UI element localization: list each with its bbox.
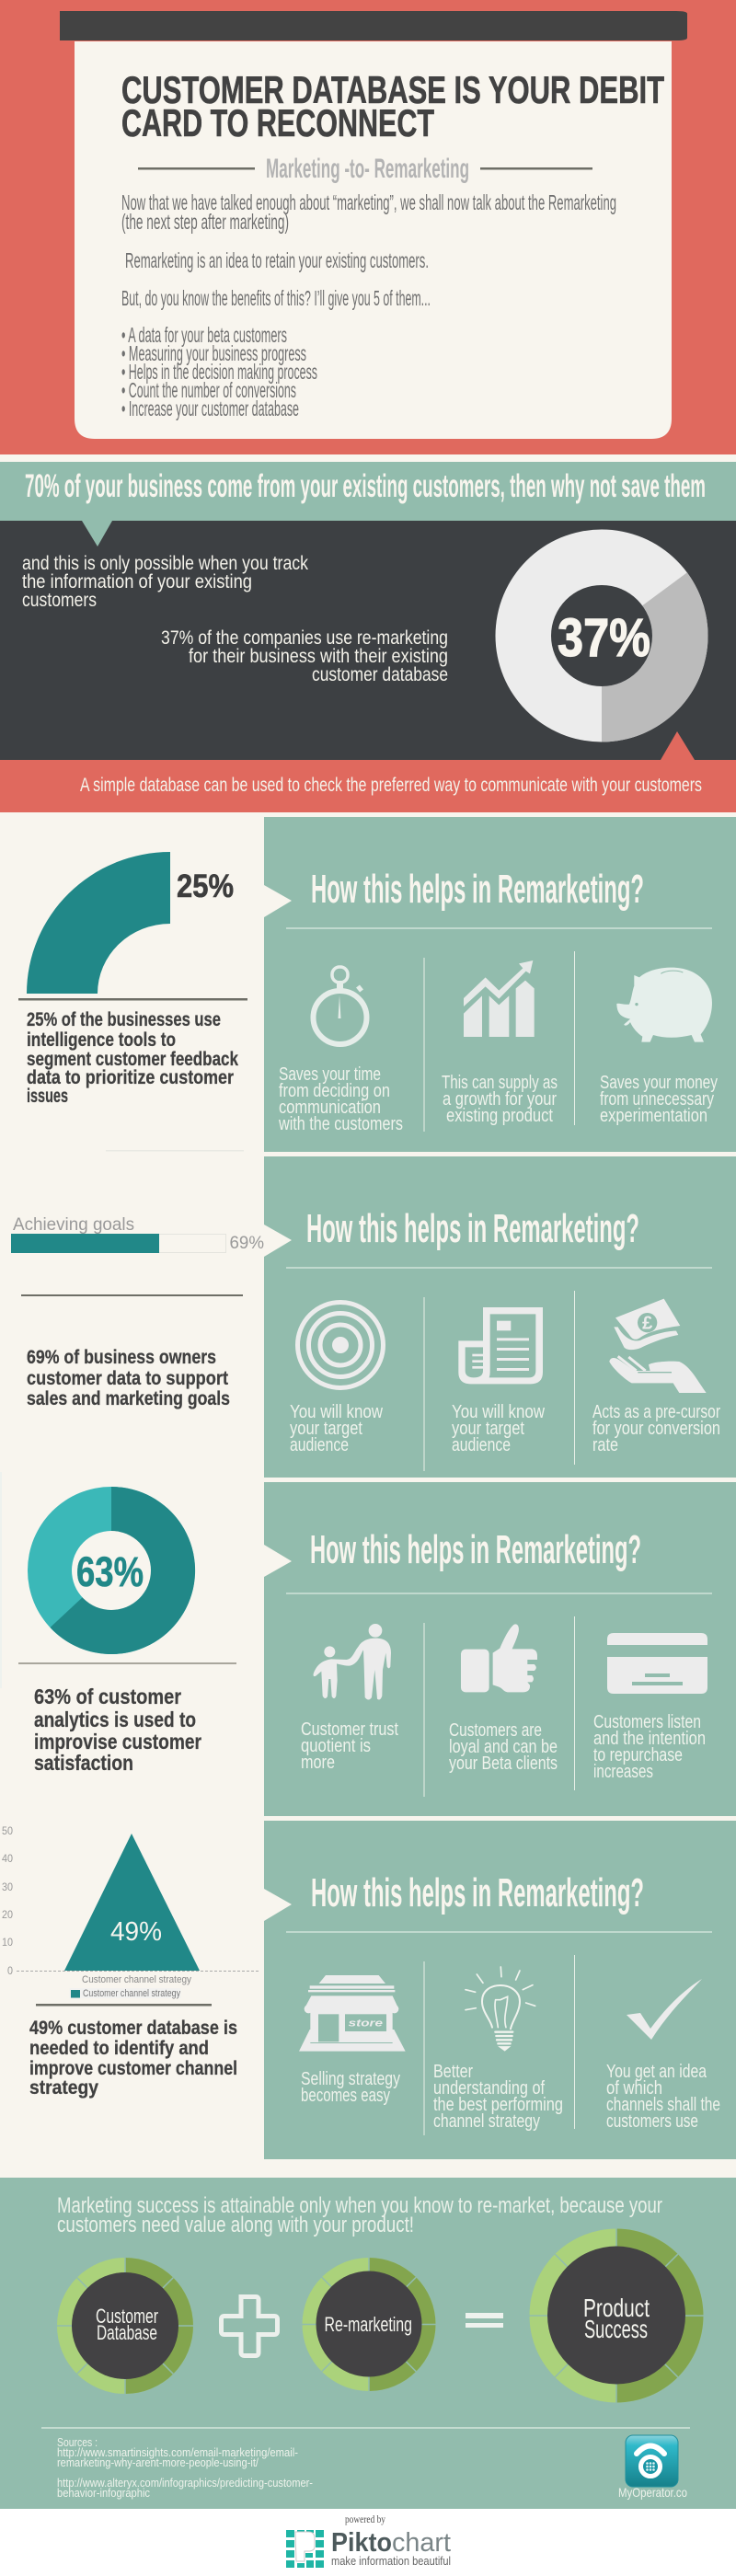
benefit text: trust: more [301,1753,335,1773]
panel: header [0,0,736,454]
69 percent description [27,1347,230,1409]
benefit text: growth [442,1073,558,1126]
benefit text: channels: You get an idea [606,2062,707,2082]
25 percent description: 25% of the businesses use [27,1009,221,1030]
triangle chart: 30 [2,1880,13,1893]
63 percent description: satisfaction [34,1751,133,1775]
benefit text: saves time: communication [279,1098,381,1118]
benefit text: target audience: audience [290,1435,349,1455]
benefit text: trust [301,1719,398,1773]
63 percent description: 63% of customer [34,1685,181,1708]
donut chart 37 percent: 37% [558,608,650,668]
benefit text: money [600,1073,718,1126]
panel: 70 percent banner [0,462,736,760]
benefit text: selling: Selling strategy [301,2069,400,2089]
icon: MyOperator logo [618,2435,687,2500]
benefit text: loyalty: Customers are [449,1720,542,1741]
icon: target [298,1303,383,1387]
panel: conclusion [0,2178,736,2509]
tracking text: the information of your existing [22,571,252,592]
benefit text: repurchase: and the intention [593,1729,706,1749]
ring: product success: Product [583,2294,650,2322]
37 percent text [161,627,448,685]
icon: stopwatch [313,967,366,1044]
ring: re-marketing: Re-marketing [324,2313,412,2336]
icon: growth chart [464,960,535,1037]
icon: light bulb [466,1967,535,2051]
ring: customer database [57,2258,193,2394]
triangle chart: 0 [7,1964,13,1977]
icon: check mark [627,1979,702,2040]
49 percent description [29,2018,237,2099]
benefit text: conversion rate: rate [592,1435,618,1455]
triangle chart: 40 [2,1852,13,1865]
intro text [121,190,616,310]
tracking text [22,553,308,611]
intro text: (the next step after marketing) [121,210,289,234]
stat: 25 percent [18,852,247,1152]
panel: how this helps 4 [264,1821,736,2159]
49 percent description: strategy [29,2077,98,2099]
stat: 63 percent [0,1472,236,1775]
25 percent description: intelligence tools to [27,1029,176,1051]
benefit text: growth: a growth for your [443,1089,557,1110]
powered by: powered by [345,2513,385,2525]
benefit text: money: experimentation [600,1106,707,1126]
panel: how this helps 3 [264,1482,736,1816]
63 percent description [34,1685,201,1775]
donut chart 63 percent [28,1487,195,1654]
benefits list: • Increase your customer database [121,397,299,420]
icon: money in hand [609,1299,707,1393]
Piktochart icon [286,2530,324,2568]
benefits list [121,323,317,420]
ring: product success [530,2228,703,2403]
benefit text: saves time: Saves your time [279,1064,381,1085]
benefit text: selling: becomes easy [301,2086,390,2106]
sources: behavior-infographic [57,2487,150,2500]
donut chart 37 percent [495,530,708,742]
25 percent label: 25% [177,868,234,904]
63 percent description: improvise customer [34,1730,201,1754]
icon: store: store [349,2018,383,2030]
25 percent description [27,1009,238,1107]
benefit text: saves time: with the customers [278,1114,403,1134]
title: CARD TO RECONNECT [121,101,434,144]
benefit text: conversion rate [592,1402,720,1455]
benefit text: repurchase: increases [593,1762,653,1782]
triangle chart [2,1824,259,1985]
benefit text: channels: customers use [606,2111,698,2132]
banner pointer [82,521,112,546]
benefit text: target audience repeat: audience [452,1435,511,1455]
intro text: But, do you know the benefits of this? I’ll give you 5 of them... [121,286,431,310]
icon: equals [466,2313,503,2328]
Piktochart wordmark [331,2528,451,2568]
37 percent text: for their business with their existing [189,646,448,667]
benefits list: • Measuring your business progress [121,341,306,365]
icon: money in hand: £ [642,1314,652,1334]
conclusion text: customers need value along with your product! [57,2213,414,2237]
ring: customer database: Database [97,2321,157,2344]
benefit text: loyalty [449,1720,558,1774]
63 percent description: analytics is used to [34,1708,196,1731]
sources: Sources : [57,2436,98,2449]
ring: customer database: Customer [96,2305,158,2328]
benefit text: loyalty: your Beta clients [449,1754,558,1774]
ring: re-marketing [302,2258,436,2391]
benefit text: trust: Customer trust [301,1719,398,1740]
sources [57,2436,313,2500]
quarter arc chart [27,852,170,994]
icon: plus [221,2296,278,2355]
ring: product success: Success [584,2315,648,2343]
benefit text: understanding: understanding of [433,2078,545,2099]
sources: http://www.alteryx.com/infographics/predicting-customer- [57,2477,313,2490]
benefit text: channels [606,2062,720,2132]
progress bar: Achieving goals [13,1215,134,1235]
benefit text: growth: This can supply as [442,1073,558,1093]
icon: MyOperator logo: MyOperator.co [618,2485,687,2500]
panel: how this helps 1 [264,817,736,1152]
header card [75,41,672,439]
benefit text: target audience [290,1402,383,1455]
icon: thumbs up [461,1624,537,1692]
stat: 49 percent [2,1824,259,2099]
conclusion text [57,2193,662,2237]
progress bar: 69% [230,1234,264,1253]
subtitle with rules: Marketing -to- Remarketing [266,154,469,184]
panel pointer [264,1889,292,1921]
benefit text: understanding [433,2062,563,2132]
25 percent description: segment customer feedback [27,1049,238,1070]
benefit text: target audience: You will know [290,1402,383,1422]
benefits list: • Count the number of conversions [121,378,296,402]
sources: remarketing-why-arent-more-people-using-it/ [57,2456,259,2469]
dark top bar [60,11,687,40]
icon: newspaper [458,1307,543,1384]
benefit text: repurchase: to repurchase [593,1745,683,1765]
tracking text: and this is only possible when you track [22,553,308,574]
icon: store [299,1975,406,2052]
triangle chart: Customer channel strategy [82,1974,191,1985]
benefit text: target audience repeat: your target [452,1419,524,1439]
intro text: Remarketing is an idea to retain your existing customers. [125,248,429,272]
footer: powered by Piktochart [0,2509,736,2576]
Piktochart wordmark: make information beautiful [331,2554,451,2568]
icon: parent and child [314,1624,391,1699]
Piktochart wordmark: chart [392,2528,451,2558]
benefit text: repurchase: Customers listen [593,1712,701,1732]
37 percent text: customer database [312,664,448,685]
panel pointer [264,1225,292,1257]
benefit text: target audience repeat: You will know [452,1402,545,1422]
panel: how this helps 2 [264,1156,736,1478]
stat: 69 percent [11,1215,264,1409]
tracking text: customers [22,590,97,611]
panel pointer [264,1545,292,1577]
benefit text: understanding: channel strategy [433,2111,540,2132]
icon: credit card [607,1633,707,1694]
Piktochart wordmark: Pikto [331,2528,392,2558]
69 percent description: 69% of business owners [27,1347,216,1368]
25 percent description: data to prioritize customer [27,1067,234,1088]
69 percent description: sales and marketing goals [27,1388,230,1409]
49 percent description: improve customer channel [29,2058,237,2079]
benefit text: understanding: Better [433,2062,473,2082]
triangle chart: 50 [2,1824,13,1837]
49 percent description: needed to identify and [29,2038,209,2059]
benefits list: • Helps in the decision making process [121,360,317,384]
benefits list: • A data for your beta customers [121,323,287,347]
69 percent description: customer data to support [27,1368,228,1389]
triangle chart: 20 [2,1908,13,1921]
panel pointer [264,885,292,917]
sources: http://www.smartinsights.com/email-marketing/email- [57,2446,298,2459]
benefit text: target audience repeat [452,1402,545,1455]
benefit text: saves time [278,1064,403,1134]
triangle chart: 49% [110,1917,162,1947]
benefit text: repurchase [593,1712,706,1782]
icon: piggy bank [616,968,712,1042]
benefit text: saves time: from deciding on [279,1081,390,1101]
benefit text: selling [301,2069,400,2106]
chart legend: Customer channel strategy [83,1988,180,1999]
donut chart 63 percent: 63% [76,1548,144,1595]
37 percent text: 37% of the companies use re-marketing [161,627,448,649]
panel: red callout [0,731,736,812]
progress bar [11,1215,264,1253]
benefit text: target audience: your target [290,1419,362,1439]
25 percent description: issues [27,1086,68,1107]
49 percent description: 49% customer database is [29,2018,237,2039]
triangle chart: 10 [2,1936,13,1949]
benefit text: trust: quotient is [301,1736,371,1756]
benefit text: loyalty: loyal and can be [449,1737,558,1757]
benefit text: understanding: the best performing [433,2095,563,2115]
benefit text: growth: existing product [446,1106,553,1126]
title [121,68,664,144]
benefit text: channels: of which [606,2078,662,2099]
